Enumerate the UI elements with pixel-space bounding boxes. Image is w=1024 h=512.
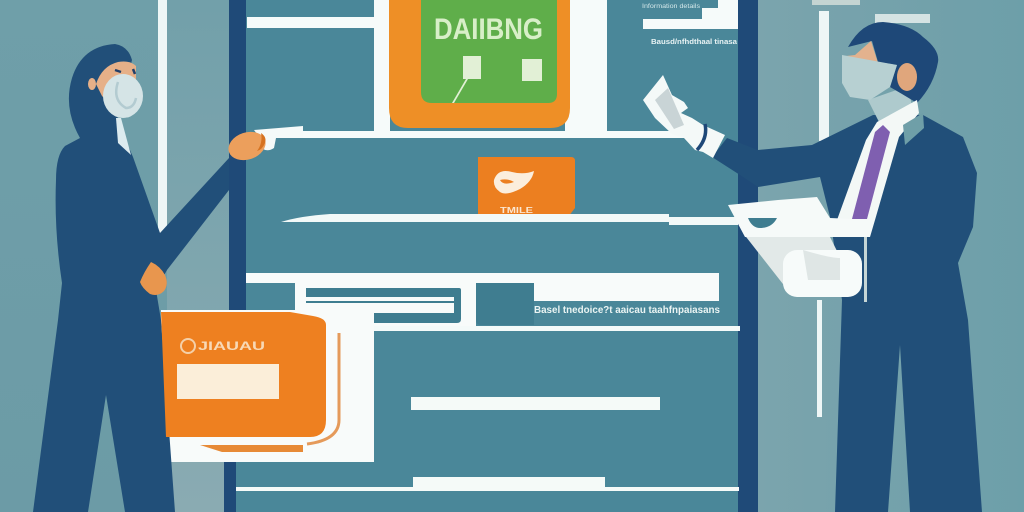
orange folder [161, 312, 339, 452]
card label: TMILE [500, 206, 534, 215]
folder label: JIAUAU [198, 339, 265, 353]
small caption below steps: Bausd/nfhdthaal tinasa [651, 39, 737, 46]
right person hand with paper [643, 75, 725, 158]
left person lower hand [140, 262, 167, 295]
sign squares [452, 56, 542, 103]
sign title: DAIIBNG [434, 13, 543, 46]
right person face [846, 41, 878, 63]
wall posts [158, 0, 930, 417]
middle panel structure [161, 273, 740, 462]
left person legs and body [33, 44, 229, 512]
middle text line: Basel tnedoice?t aaicau taahfnpaiasans [534, 305, 720, 316]
left person mask [103, 74, 143, 118]
left person [33, 44, 303, 512]
folder label [181, 339, 265, 353]
orange sign with green screen [389, 0, 570, 128]
white bars lower board [236, 397, 739, 491]
right person neck [868, 86, 912, 124]
left person ear [88, 78, 96, 90]
right person [643, 22, 982, 512]
right person hair [848, 22, 938, 103]
right person ear [897, 63, 917, 91]
left person raised hand [225, 126, 303, 165]
small orange card [478, 157, 575, 217]
board panel [224, 0, 758, 512]
right person lapel [903, 113, 924, 145]
folder curved edge [307, 333, 339, 444]
right person mask [842, 55, 897, 100]
shelf line [281, 214, 738, 225]
left person eye [115, 69, 135, 74]
card logo [494, 171, 534, 193]
right person shirt [837, 100, 919, 220]
tray and papers [728, 197, 875, 302]
right person suit and legs [712, 115, 982, 512]
small caption top right: Information details [642, 4, 700, 10]
left person face [96, 62, 136, 112]
folder cream panel [177, 364, 279, 399]
left person collar [116, 118, 131, 155]
right person tie [852, 125, 890, 219]
folder bottom tab [200, 445, 303, 452]
board top structure [247, 0, 738, 138]
